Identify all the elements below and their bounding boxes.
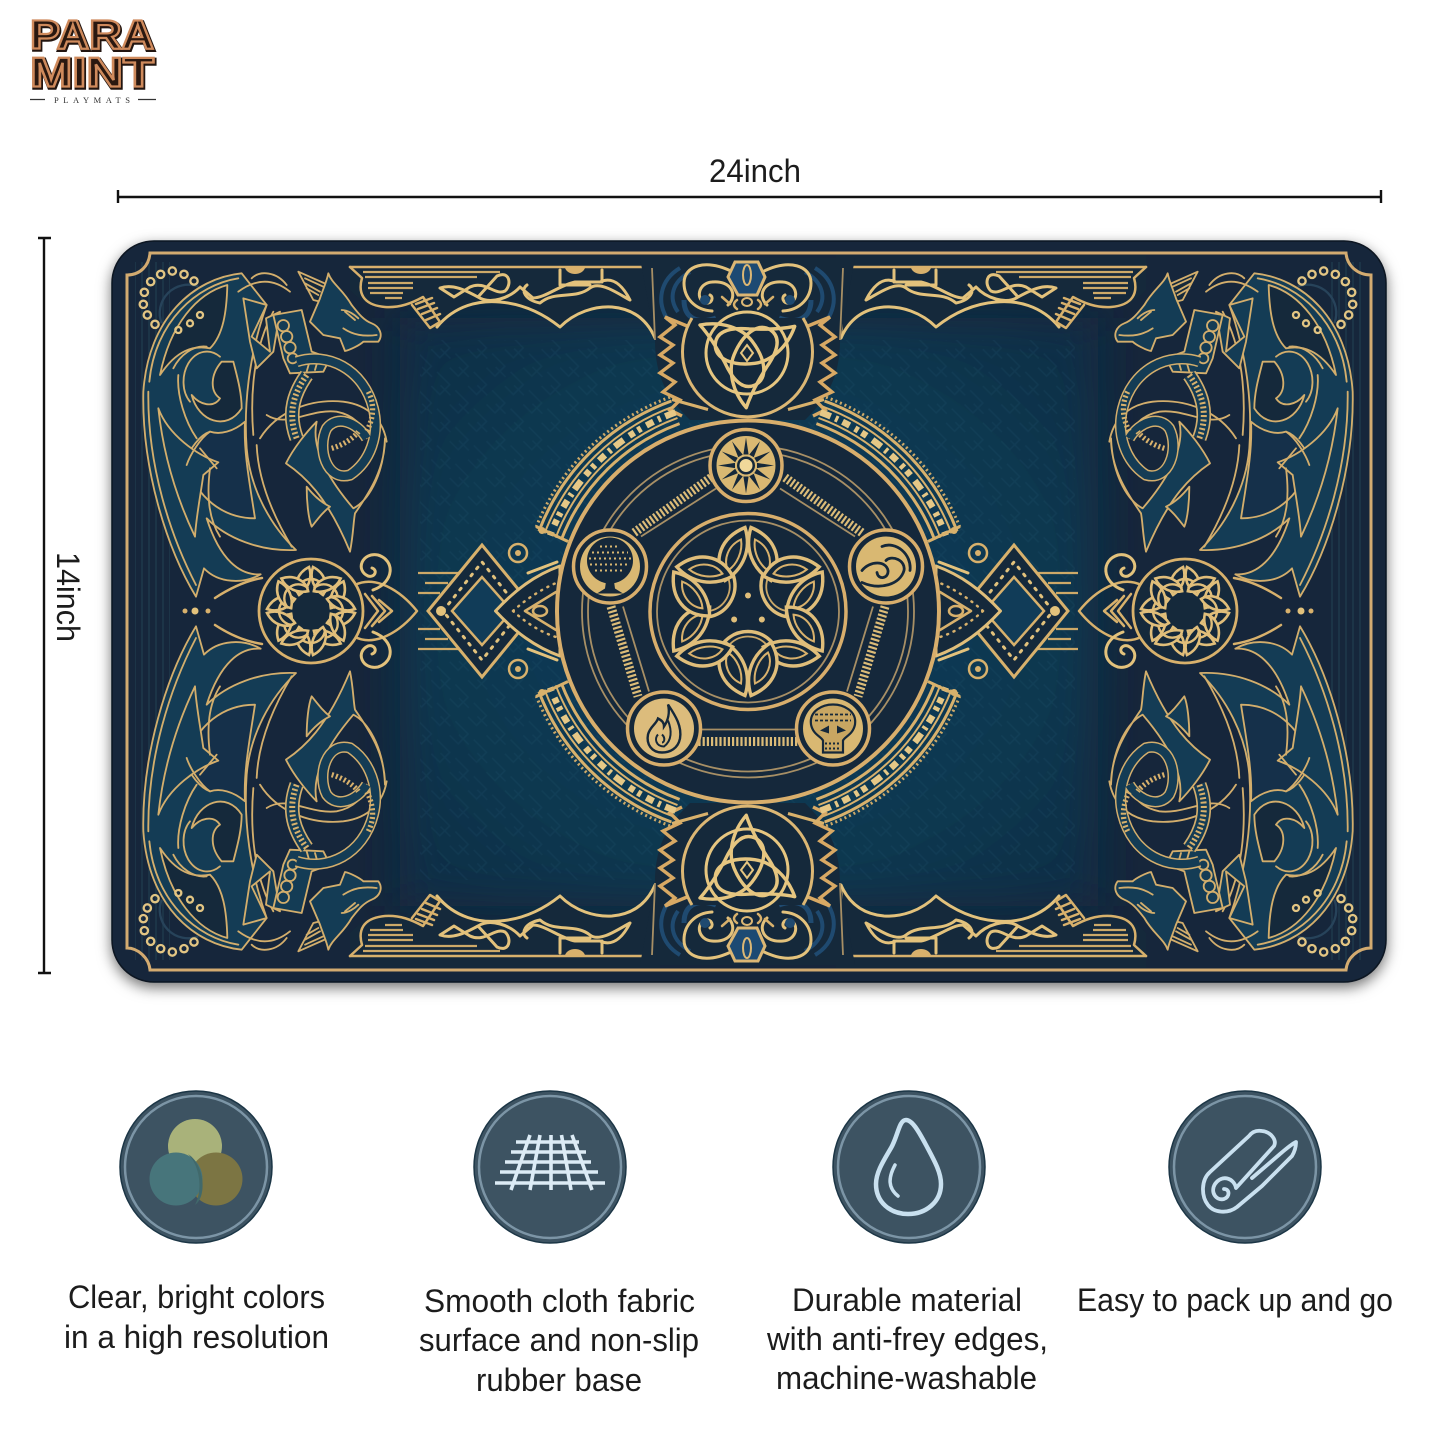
logo: MINT	[31, 50, 155, 97]
node: fire	[628, 692, 700, 765]
dimension: height 14inch: 14inch	[50, 552, 86, 642]
logo: PARA	[30, 12, 154, 58]
mat frame	[127, 253, 1371, 970]
icon: water drop	[833, 1091, 985, 1243]
right side ornaments	[936, 544, 1314, 678]
text: colors: Clear, bright colors	[68, 1279, 325, 1315]
logo: MINT	[30, 48, 154, 96]
top right dragon corner	[836, 255, 1356, 597]
rune band: bottom right	[788, 682, 961, 826]
main ring	[557, 420, 939, 802]
playmat	[112, 241, 1386, 982]
logo: PLAYMATS	[54, 95, 130, 105]
node: tree	[574, 530, 646, 603]
text: fabric: Smooth cloth fabric	[424, 1283, 695, 1319]
left side ornaments	[182, 544, 560, 678]
right rosette	[1133, 559, 1237, 663]
dimension: height 14inch	[38, 238, 86, 973]
logo	[30, 12, 156, 105]
icon: cloth grid	[474, 1091, 626, 1243]
icon: colors	[120, 1091, 272, 1243]
node: air	[850, 530, 922, 603]
text: durable: with anti-frey edges,	[766, 1321, 1048, 1357]
bottom medallion	[640, 803, 855, 965]
top left dragon corner	[140, 255, 660, 597]
central elemental circle	[535, 397, 961, 826]
text: portable: Easy to pack up and go	[1077, 1282, 1393, 1318]
dimension: width 24inch: 24inch	[709, 153, 801, 189]
text: fabric	[419, 1283, 699, 1398]
bottom left dragon corner	[140, 626, 660, 968]
text: durable: Durable material	[792, 1282, 1022, 1318]
text: fabric: surface and non-slip	[419, 1322, 699, 1358]
text: colors: in a high resolution	[64, 1319, 329, 1355]
rune band: top right	[788, 397, 961, 542]
center knot	[650, 514, 846, 710]
top medallion	[640, 258, 855, 420]
zigzag pentagon	[611, 478, 885, 742]
text: fabric: rubber base	[476, 1362, 642, 1398]
rune band: top left	[535, 397, 708, 542]
text: durable	[766, 1282, 1048, 1396]
logo: PARA	[31, 13, 155, 59]
node: sun	[710, 430, 782, 502]
bottom right dragon corner	[836, 626, 1356, 968]
icon: rolled mat	[1169, 1091, 1321, 1243]
left rosette	[259, 559, 363, 663]
node: skull	[796, 692, 870, 765]
rune band: bottom left	[535, 682, 708, 826]
text: durable: machine-washable	[776, 1360, 1037, 1396]
dimension: width 24inch	[118, 153, 1381, 203]
text: colors	[64, 1279, 329, 1355]
